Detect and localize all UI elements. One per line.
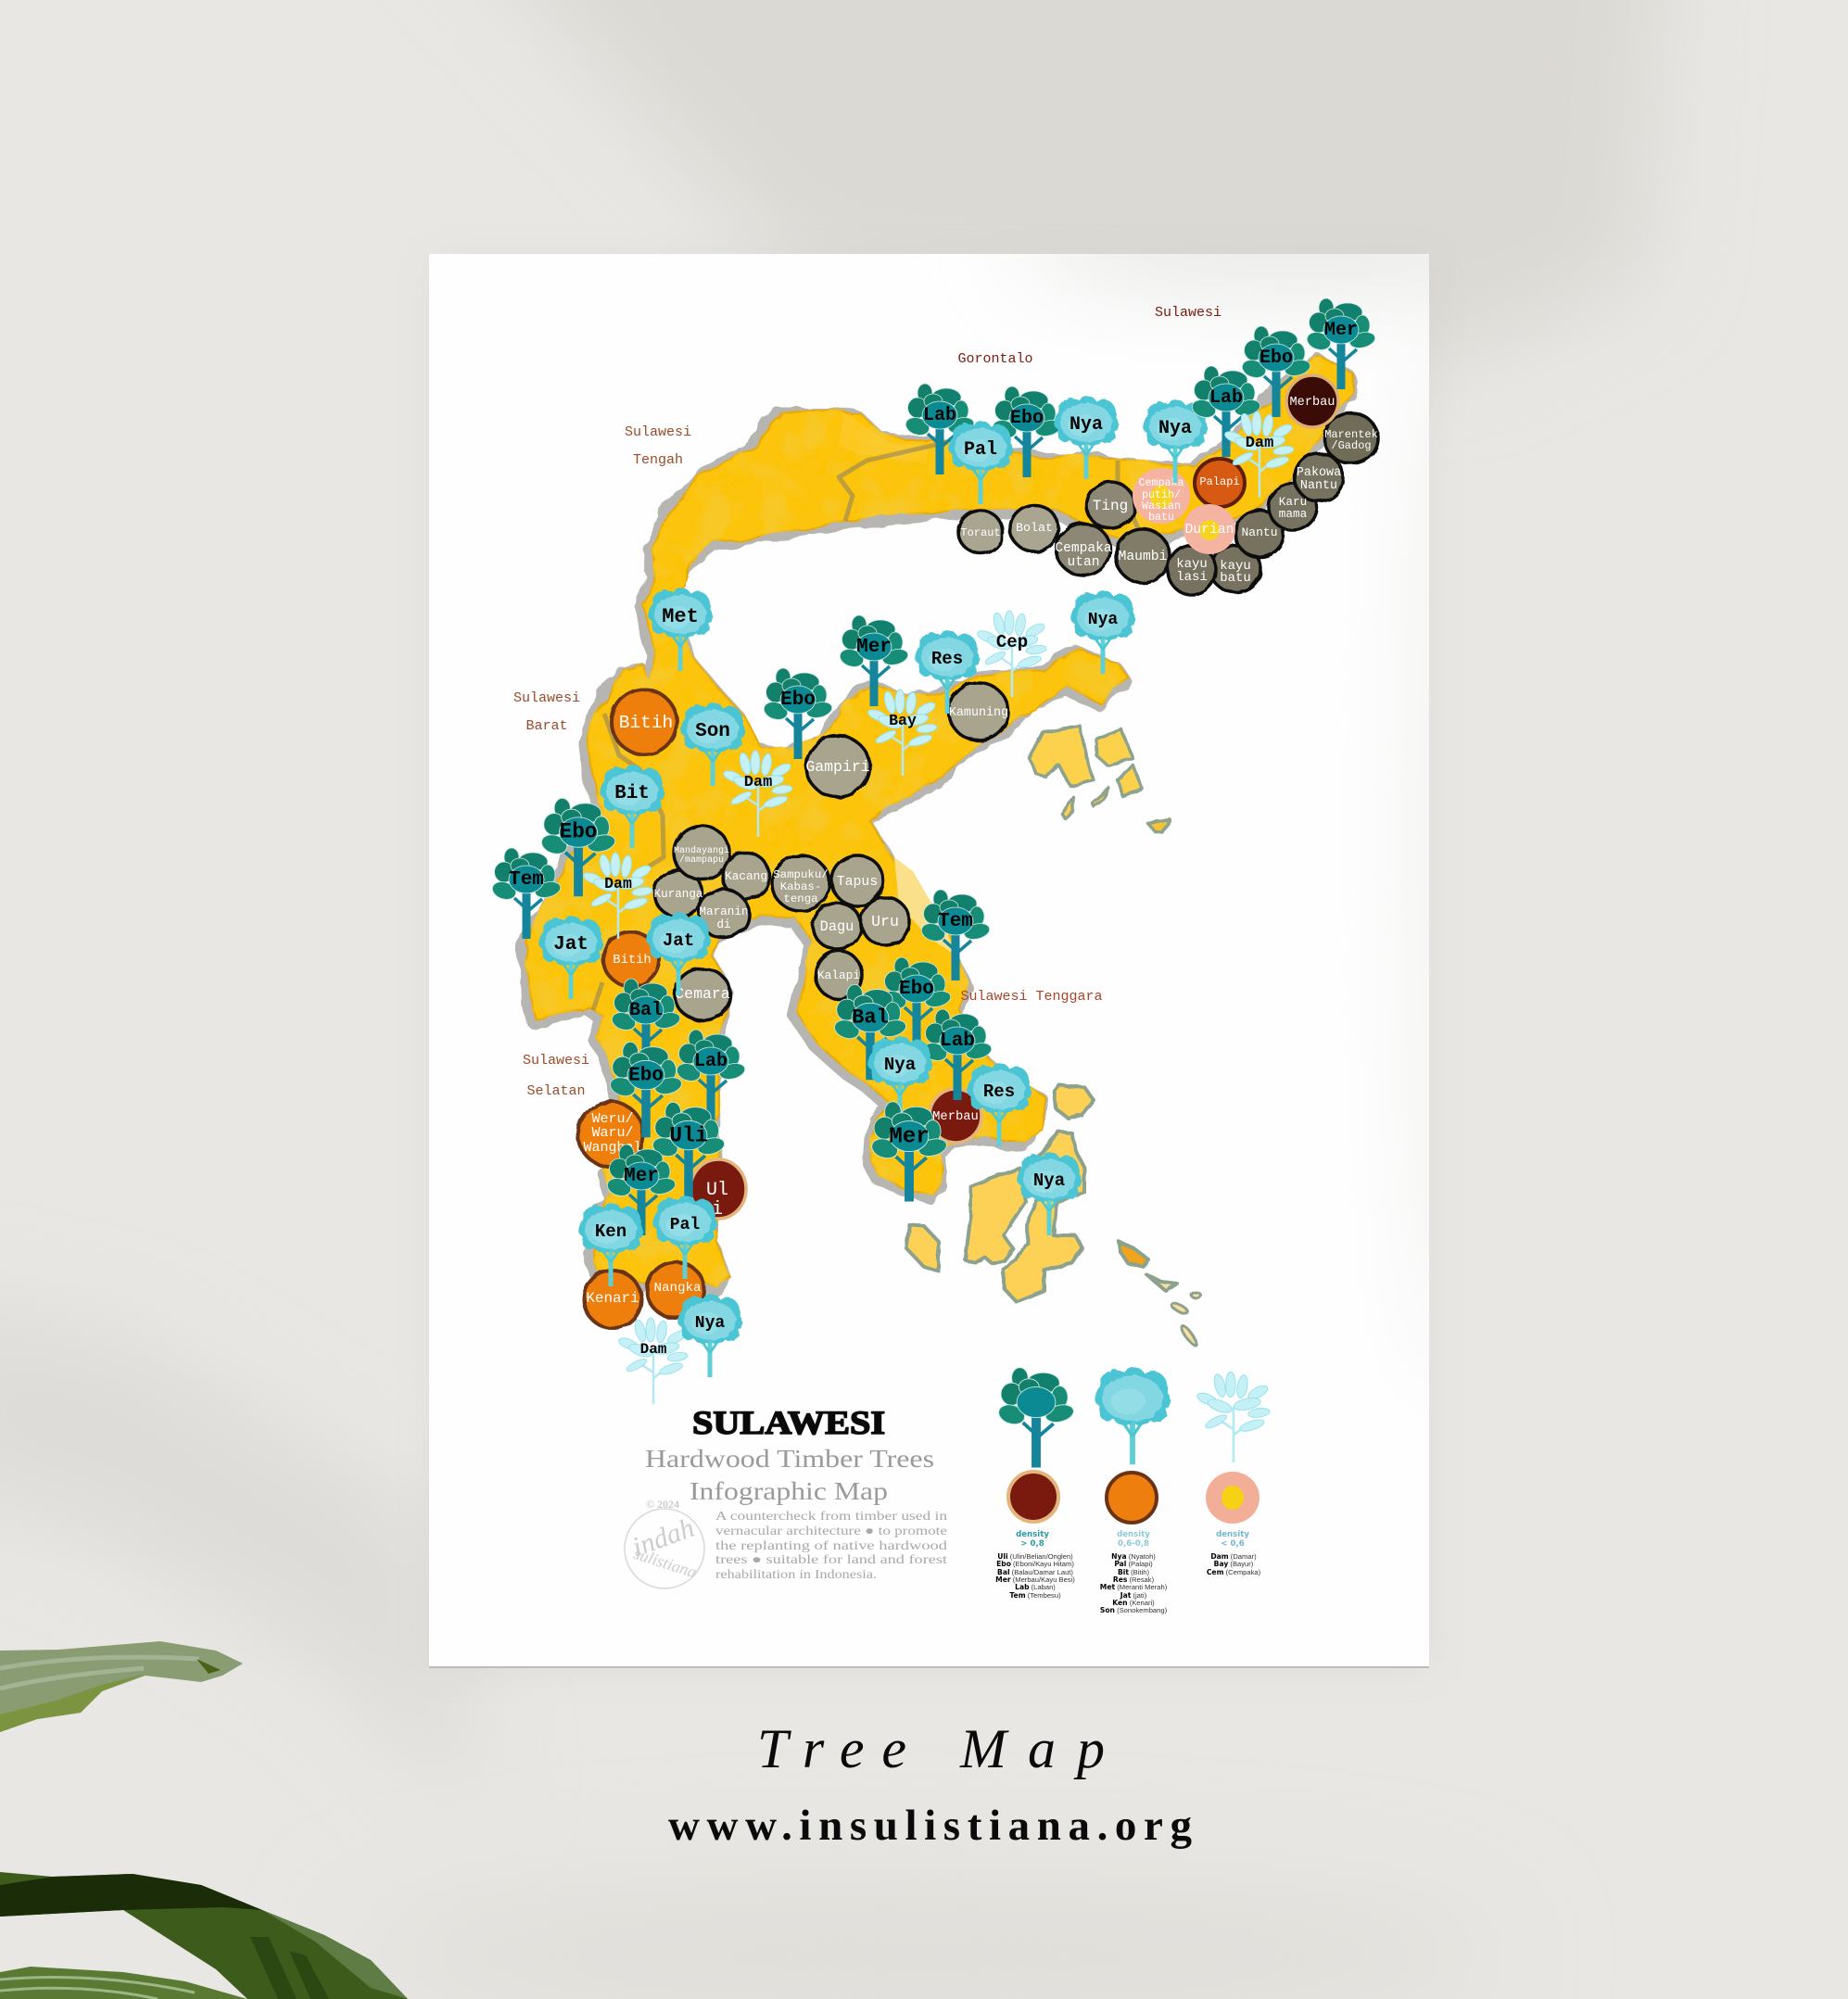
- tree: Mer southeast: Mer: [889, 1125, 930, 1150]
- circle labels: putih/: [1142, 488, 1181, 501]
- circle labels: /mampapu: [679, 854, 724, 866]
- subtitle: Infographic Map: [690, 1477, 888, 1505]
- tree: Lab north: [904, 384, 976, 474]
- tree: Ebo southeast: Ebo: [899, 979, 934, 1000]
- tree: Jat west: [538, 916, 603, 999]
- tree: Nya southeast: Nya: [884, 1055, 916, 1075]
- region labels: Sulawesi: [1155, 305, 1221, 321]
- subtitle: [645, 1445, 934, 1505]
- tree: Pal north: Pal: [964, 439, 997, 461]
- circle labels: Wanghal: [583, 1140, 642, 1156]
- land shadow: [522, 358, 1349, 1291]
- description: [715, 1509, 947, 1581]
- description: vernacular architecture ● to promote: [715, 1524, 947, 1537]
- description: A countercheck from timber used in: [715, 1509, 947, 1523]
- province borders: [593, 442, 1138, 1010]
- legend: medium density: density: [1117, 1530, 1150, 1539]
- Southeast islands: [906, 1085, 1200, 1347]
- tree: Res central: [915, 630, 980, 714]
- tree: Bay: Bay: [889, 712, 917, 729]
- region labels: Sulawesi: [523, 1053, 589, 1069]
- tree: Mer central: Mer: [856, 637, 892, 658]
- circle: Palapi: [1195, 459, 1245, 507]
- circle labels: Uru: [871, 913, 899, 930]
- tree: Res southeast: Res: [983, 1082, 1015, 1102]
- tree: Jat central: [646, 912, 711, 995]
- tree: Nya north 2: [1143, 399, 1208, 483]
- circle labels: Gampiri: [805, 758, 870, 776]
- description: rehabilitation in Indonesia.: [715, 1567, 877, 1581]
- circle labels: Cempaka: [1138, 476, 1184, 489]
- circle labels: /Gadog: [1331, 439, 1372, 452]
- circle labels: Maumbi: [1119, 550, 1168, 564]
- legend: high density: [995, 1368, 1075, 1600]
- circle labels: Nantu: [1241, 525, 1278, 539]
- circle labels: Merbau: [1290, 396, 1335, 410]
- legend: medium density: [1095, 1367, 1171, 1614]
- logo stamp: sulistiana: [631, 1544, 699, 1582]
- circle: Durian: [1183, 504, 1235, 554]
- circle labels: Tapus: [837, 875, 878, 890]
- tree: Dam south: Dam: [640, 1341, 667, 1358]
- circle: Merbau north: [1286, 375, 1338, 427]
- tree: Tem west: Tem: [509, 869, 544, 891]
- legend: low density: density: [1216, 1530, 1249, 1539]
- map of Sulawesi: [522, 355, 1352, 1347]
- circle labels: batu: [1148, 511, 1174, 524]
- tree: Bal southeast: [832, 984, 907, 1080]
- legend: medium density: Met (Meranti Merah): [1100, 1583, 1168, 1591]
- tree: Son: [680, 702, 745, 786]
- tree: Nya central: [1070, 590, 1135, 674]
- tree: Tem west: [490, 848, 563, 939]
- legend: high density: Lab (Laban): [1015, 1583, 1056, 1591]
- tree: Uli: Uli: [669, 1123, 708, 1147]
- circle labels: kayu: [1220, 559, 1251, 574]
- legend: high density: Bal (Balau/Damar Laut): [997, 1568, 1073, 1576]
- circle labels: Ul: [706, 1180, 728, 1201]
- legend: high density: Ebo (Eboni/Kayu Hitam): [996, 1560, 1074, 1568]
- circle labels: Sampuku/: [773, 868, 829, 881]
- tree: Lab north east: [1190, 366, 1262, 457]
- legend: low density: < 0,6: [1221, 1539, 1245, 1549]
- region labels: Barat: [525, 718, 568, 734]
- tree: Uli: [651, 1102, 726, 1197]
- tree: Dam west: Dam: [604, 875, 632, 892]
- circle labels: [583, 396, 1378, 1307]
- tree: Dam central: [722, 751, 793, 837]
- circle labels: Waru/: [591, 1125, 634, 1141]
- tree: Tem east: [919, 890, 992, 981]
- tree: Ebo central: Ebo: [780, 690, 816, 711]
- tree: Bal south: [610, 979, 682, 1069]
- circle labels: kayu: [1176, 557, 1208, 572]
- tree: Ebo west: [539, 798, 617, 896]
- legend: medium density: Jat (jati): [1120, 1591, 1147, 1600]
- legend: high density: Tem (Tembesu): [1009, 1591, 1061, 1600]
- tree: Mer north east: [1305, 298, 1377, 389]
- tree: Nya southeast: [867, 1036, 932, 1120]
- description: trees ● suitable for land and forest: [715, 1552, 947, 1566]
- circle labels: Mandayangi: [674, 845, 729, 856]
- legend: high density: Mer (Merbau/Kayu Besi): [995, 1575, 1075, 1584]
- title: SULAWESI: [692, 1404, 885, 1441]
- tree: Dam west: [582, 853, 653, 939]
- circle labels: lasi: [1176, 570, 1208, 585]
- tree: Res southeast: [967, 1063, 1032, 1146]
- legend: medium density: Res (Resak): [1113, 1575, 1155, 1584]
- tree: Lab north east: Lab: [1209, 387, 1243, 409]
- circle labels: di: [716, 917, 731, 931]
- circle labels: Kalapi: [817, 968, 860, 982]
- circle labels: Nantu: [1300, 479, 1337, 493]
- tree: Ebo south: [608, 1042, 683, 1137]
- caption: Tree Map: [757, 1718, 1105, 1779]
- legend: low density: Bay (Bayur): [1214, 1560, 1254, 1568]
- circles: orange: [578, 690, 704, 1328]
- circle labels: Cemara: [675, 985, 730, 1003]
- circle labels: Kuranga: [654, 888, 703, 901]
- tree: Tem east: Tem: [938, 911, 973, 932]
- circle labels: Maranin: [699, 905, 749, 918]
- region labels: Gorontalo: [957, 351, 1033, 367]
- circle labels: Marentek: [1324, 428, 1378, 441]
- circle labels: Karu: [1279, 495, 1307, 509]
- legend: medium density: Ken (Kenari): [1112, 1599, 1155, 1607]
- caption: Tree Map: Map: [959, 1718, 1105, 1779]
- region labels: Sulawesi: [625, 424, 691, 440]
- tree: Ebo southeast: [880, 957, 953, 1048]
- tree: Bal south: Bal: [629, 1000, 663, 1021]
- legend: high density: Uli (Ulin/Belian/Onglen): [997, 1552, 1073, 1561]
- tree: Nya north 2: Nya: [1158, 418, 1192, 439]
- tree: Ken: Ken: [595, 1221, 627, 1242]
- circle labels: Kamuning: [949, 706, 1008, 720]
- circle labels: Wasian: [1142, 500, 1181, 512]
- circle labels: Dagu: [820, 918, 854, 935]
- tree: Nya south: Nya: [695, 1314, 725, 1333]
- circles: north arm: [958, 413, 1378, 595]
- leaf: upper plant leaf: [0, 1641, 243, 1732]
- legend: high density: > 0,8: [1020, 1539, 1044, 1549]
- region labels: Sulawesi: [513, 690, 580, 706]
- tree: Ken: [578, 1203, 643, 1286]
- tree: Met: Met: [662, 605, 699, 628]
- legend: medium density: Son (Sonokembang): [1100, 1606, 1168, 1614]
- legend: low density: [1196, 1372, 1270, 1576]
- description: the replanting of native hardwood: [715, 1538, 947, 1552]
- pale patch west: [839, 412, 927, 463]
- tree: Nya north 1: Nya: [1070, 414, 1103, 436]
- circle labels: Toraut: [960, 526, 1001, 539]
- legend: low density: Dam (Damar): [1210, 1552, 1257, 1561]
- tree: Ebo north east: Ebo: [1259, 348, 1293, 369]
- legend: medium density: 0,6-0,8: [1118, 1539, 1149, 1549]
- tree: Nya north 1: [1054, 396, 1119, 479]
- circle labels: Kacang: [725, 869, 767, 883]
- tree: Jat central: Jat: [663, 930, 694, 951]
- tree: Bay: [867, 690, 938, 776]
- tree: Lab southeast: [921, 1009, 994, 1100]
- region labels: Tengah: [633, 452, 683, 468]
- caption: Tree Map: Tree: [757, 1718, 906, 1779]
- tree: Mer central: [838, 615, 910, 706]
- tree: Bit: Bit: [614, 783, 650, 804]
- tree: Jat west: Jat: [553, 934, 589, 955]
- tree: Ebo south: Ebo: [628, 1065, 664, 1086]
- circle labels: Kabas-: [780, 880, 821, 893]
- circle labels: Durian: [1185, 523, 1234, 538]
- tree: Lab southeast: Lab: [940, 1031, 975, 1052]
- tree: Nya Buton: Nya: [1033, 1170, 1065, 1191]
- legend: high density: density: [1016, 1530, 1049, 1539]
- tree: Mer south: Mer: [624, 1166, 659, 1187]
- tree: Res central: Res: [931, 649, 963, 669]
- circle labels: Kenari: [586, 1290, 639, 1307]
- circles: dark red: [690, 1089, 981, 1219]
- circle labels: mama: [1279, 507, 1308, 521]
- tree: Lab south: Lab: [694, 1051, 728, 1072]
- circles: central: [654, 683, 1008, 1020]
- tree: Pal south: Pal: [670, 1216, 700, 1234]
- tree: Dam north: Dam: [1246, 435, 1273, 452]
- tree: Lab north: Lab: [923, 405, 956, 426]
- region labels: [513, 305, 1221, 1099]
- tree: Cep: [976, 611, 1047, 697]
- Banggai islands: [1029, 726, 1170, 832]
- circle labels: Bolat: [1016, 521, 1053, 535]
- tree: Dam south: [617, 1318, 689, 1404]
- tree: Nya Buton: [1017, 1152, 1082, 1235]
- tree: Ebo north: Ebo: [1010, 408, 1044, 429]
- tree: Ebo north east: [1240, 326, 1312, 417]
- tree: Ebo north: [991, 386, 1063, 477]
- circle labels: batu: [1220, 571, 1251, 586]
- subtitle: Hardwood Timber Trees: [645, 1445, 934, 1473]
- circle labels: Cempaka: [1055, 541, 1112, 556]
- tree: Pal south: [652, 1196, 717, 1279]
- circle labels: Merbau: [932, 1109, 979, 1124]
- tree: Ebo west: Ebo: [560, 819, 597, 843]
- region labels: Sulawesi Tenggara: [960, 989, 1103, 1005]
- circle labels: utan: [1067, 555, 1100, 570]
- tree: Mer southeast: [869, 1102, 948, 1201]
- tree: Dam north: [1223, 411, 1295, 498]
- tree: Dam central: Dam: [744, 774, 772, 791]
- tree: Met: [648, 588, 713, 671]
- tree: Lab south: [675, 1030, 747, 1120]
- tree: Pal north: [948, 421, 1013, 504]
- tree: Cep: Cep: [996, 632, 1028, 652]
- leaf: striped plant leaf: [0, 1967, 247, 1999]
- circle labels: i: [712, 1199, 723, 1221]
- logo stamp: © 2024: [646, 1498, 679, 1511]
- legend: low density: Cem (Cempaka): [1207, 1568, 1261, 1576]
- tree: Ebo central: [762, 668, 834, 759]
- tree: Nya central: Nya: [1088, 611, 1118, 629]
- circle labels: Bitih: [613, 953, 652, 968]
- tree: Bit: [600, 765, 665, 848]
- tree: Bal southeast: Bal: [852, 1006, 889, 1029]
- circle labels: Weru/: [591, 1111, 634, 1127]
- logo stamp: indah: [628, 1512, 699, 1563]
- pale patch: [894, 857, 955, 955]
- leaf: dark plant leaf: [0, 1872, 408, 1999]
- legend: medium density: Bit (Bitih): [1118, 1568, 1149, 1576]
- circle labels: Palapi: [1199, 475, 1240, 488]
- logo stamp: [625, 1498, 704, 1588]
- circle labels: Ting: [1093, 498, 1128, 514]
- circle labels: Nangka: [653, 1281, 702, 1296]
- region labels: Selatan: [526, 1083, 586, 1099]
- legend: medium density: Pal (Palapi): [1114, 1560, 1153, 1568]
- poster sheet: [429, 254, 1429, 1668]
- tree: Son: Son: [695, 721, 730, 742]
- caption: website: www.insulistiana.org: [668, 1802, 1192, 1850]
- circle: Cempaka putih: [1133, 468, 1190, 524]
- circle labels: tenga: [783, 892, 818, 905]
- legend: medium density: Nya (Nyatoh): [1111, 1552, 1156, 1561]
- tree: Nya south: [677, 1294, 742, 1377]
- circle labels: Pakowa: [1297, 466, 1341, 480]
- tree: Mer south: [605, 1145, 677, 1235]
- tree: Mer north east: Mer: [1324, 320, 1358, 341]
- land body: [525, 355, 1352, 1288]
- circle labels: Bitih: [619, 713, 673, 733]
